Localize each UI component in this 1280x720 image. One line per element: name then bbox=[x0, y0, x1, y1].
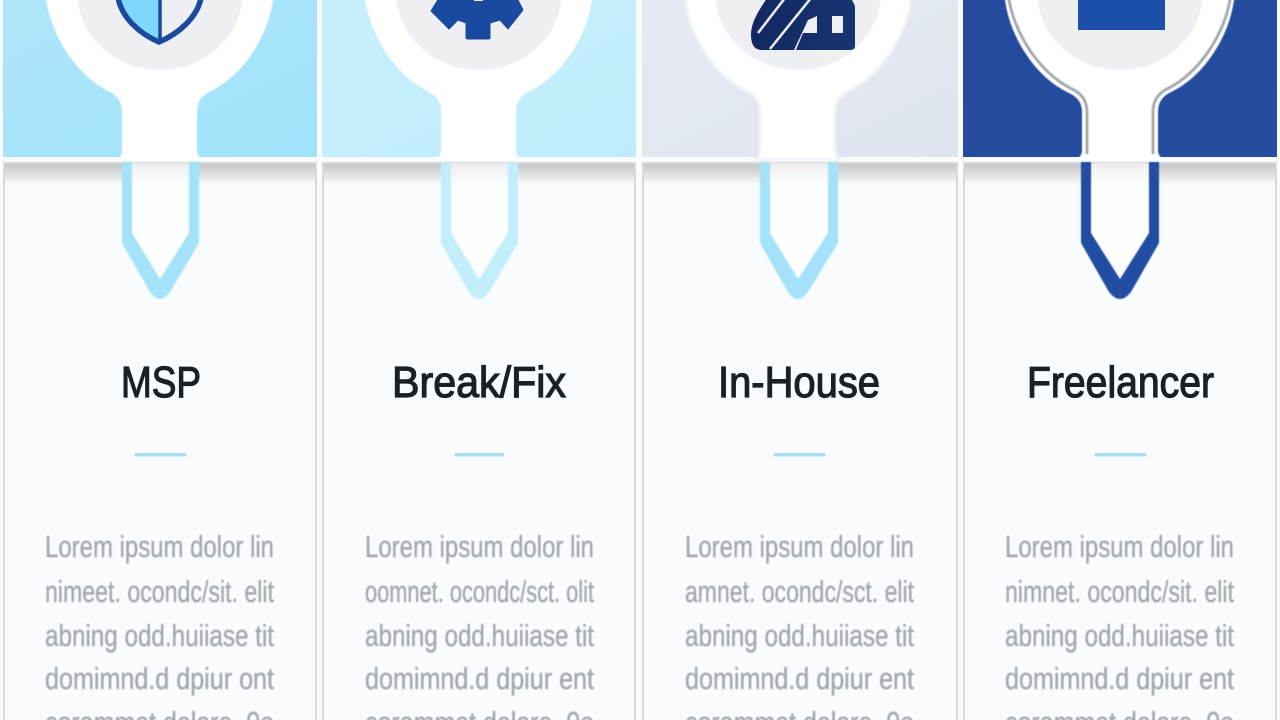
accent dash bbox=[455, 453, 504, 456]
icon: gear bbox=[431, 0, 523, 39]
body text: Lorem ipsum dolor lin bbox=[685, 529, 914, 564]
icon disc bbox=[396, 0, 562, 70]
heading: Freelancer: Freelancer bbox=[1027, 358, 1214, 407]
lower card bbox=[964, 163, 1276, 720]
panel: In-House bbox=[642, 0, 958, 720]
pin interior bbox=[449, 163, 510, 281]
card top shadow bbox=[644, 164, 956, 184]
icon: shield bbox=[118, 0, 201, 42]
body text: nimeet. ocondc/sit. elit bbox=[45, 574, 274, 609]
body text: Lorem ipsum dolor lin bbox=[45, 529, 274, 564]
accent dash bbox=[1095, 453, 1146, 456]
lower card bbox=[643, 163, 957, 720]
body text: Lorem ipsum dolor lin bbox=[365, 529, 594, 564]
pin interior bbox=[1089, 163, 1151, 281]
top colour band bbox=[642, 0, 958, 157]
pin tail bbox=[1081, 162, 1159, 299]
accent dash bbox=[135, 453, 186, 456]
body text: abning odd.huiiase tit bbox=[45, 618, 274, 653]
lower card bbox=[323, 163, 635, 720]
pin interior bbox=[768, 163, 830, 281]
panel: Freelancer bbox=[963, 0, 1277, 720]
icon disc bbox=[77, 0, 243, 70]
icon: building bbox=[751, 0, 855, 50]
spoon badge bbox=[1006, 0, 1233, 160]
spoon badge bbox=[46, 0, 273, 160]
heading: In-House: In-House bbox=[718, 358, 880, 407]
icon disc bbox=[715, 0, 881, 70]
body text bbox=[1005, 529, 1234, 720]
panel: MSP bbox=[3, 0, 317, 720]
pin tail bbox=[122, 162, 199, 299]
accent dash bbox=[774, 453, 825, 456]
icon disc bbox=[1037, 0, 1203, 70]
body text: abning odd.huiiase tit bbox=[365, 618, 594, 653]
body text: domimnd.d dpiur ent bbox=[365, 661, 594, 696]
body text bbox=[45, 529, 274, 720]
lower card bbox=[4, 163, 316, 720]
card top shadow bbox=[324, 164, 634, 184]
body text: amnet. ocondc/sct. elit bbox=[685, 574, 914, 609]
body text bbox=[365, 529, 594, 720]
spoon badge bbox=[365, 0, 592, 160]
pin interior bbox=[130, 163, 191, 281]
body text: oomnet. ocondc/sct. olit bbox=[365, 574, 594, 609]
body text: domimnd.d dpiur ent bbox=[685, 661, 914, 696]
spoon badge bbox=[685, 0, 911, 160]
icon: square block bbox=[1078, 0, 1165, 30]
heading: Break/Fix: Break/Fix bbox=[392, 358, 566, 407]
card top shadow bbox=[965, 164, 1275, 184]
top colour band bbox=[963, 0, 1277, 157]
top colour band bbox=[322, 0, 636, 157]
body text: abning odd.huiiase tit bbox=[685, 618, 914, 653]
body text: domimnd.d dpiur ent bbox=[1005, 661, 1234, 696]
top colour band bbox=[3, 0, 317, 157]
pin tail bbox=[441, 162, 518, 299]
body text: domimnd.d dpiur ont bbox=[45, 661, 274, 696]
panel: Break/Fix bbox=[322, 0, 636, 720]
heading: MSP: MSP bbox=[121, 358, 201, 407]
card top shadow bbox=[5, 164, 315, 184]
pin tail bbox=[760, 162, 838, 299]
body text bbox=[685, 529, 914, 720]
